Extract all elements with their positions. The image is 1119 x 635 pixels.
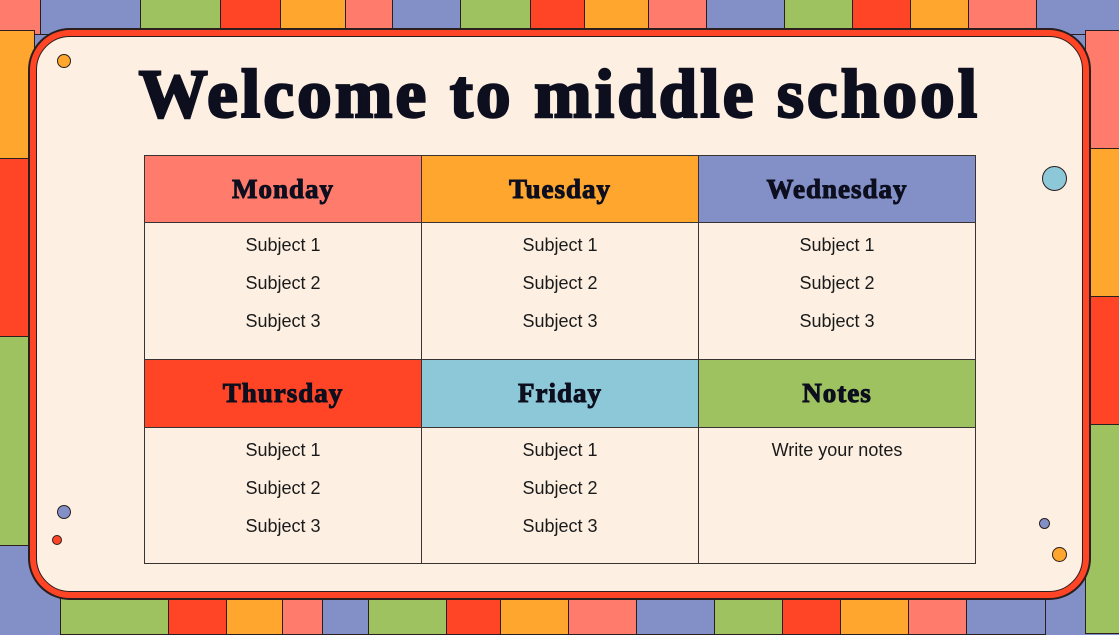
header: Monday	[144, 155, 422, 223]
header: Notes	[698, 359, 976, 428]
body: Tuesday subjects: Subject 2	[522, 273, 598, 293]
body: Friday subjects: Subject 1	[522, 440, 598, 460]
header: Wednesday	[698, 155, 976, 223]
header: Friday: Friday	[518, 378, 602, 408]
icon: teal dot	[1042, 166, 1067, 191]
body: Wednesday subjects: Subject 3	[799, 311, 875, 331]
body: Thursday subjects: Subject 1	[245, 440, 321, 460]
body: Monday subjects: Subject 2	[245, 273, 321, 293]
body: Wednesday subjects: Subject 1	[799, 235, 875, 255]
header: Notes: Notes	[802, 378, 872, 408]
body: Friday subjects	[421, 427, 699, 564]
body: Thursday subjects	[144, 427, 422, 564]
body: Friday subjects: Subject 3	[522, 516, 598, 536]
icon: orange dot	[57, 54, 71, 68]
body: Tuesday subjects	[421, 222, 699, 360]
body: Tuesday subjects: Subject 1	[522, 235, 598, 255]
icon: red dot	[52, 535, 62, 545]
body: Wednesday subjects: Subject 2	[799, 273, 875, 293]
body: Tuesday subjects: Subject 3	[522, 311, 598, 331]
header: Tuesday	[421, 155, 699, 223]
body: Thursday subjects: Subject 3	[245, 516, 321, 536]
header: Wednesday: Wednesday	[766, 174, 908, 204]
icon: blue dot	[57, 505, 71, 519]
header: Friday	[421, 359, 699, 428]
icon: orange dot right	[1052, 547, 1067, 562]
icon: small blue dot	[1039, 518, 1050, 529]
body: Thursday subjects: Subject 2	[245, 478, 321, 498]
header: Tuesday: Tuesday	[509, 174, 611, 204]
body: Notes: Write your notes	[772, 440, 902, 460]
body: Friday subjects: Subject 2	[522, 478, 598, 498]
body: Monday subjects	[144, 222, 422, 360]
title: Welcome to middle school	[139, 56, 980, 132]
body: Monday subjects: Subject 3	[245, 311, 321, 331]
body: Notes	[698, 427, 976, 564]
table: schedule	[144, 155, 976, 564]
header: Thursday	[144, 359, 422, 428]
body: Monday subjects: Subject 1	[245, 235, 321, 255]
header: Thursday: Thursday	[223, 378, 343, 408]
header: Monday: Monday	[232, 174, 334, 204]
body: Wednesday subjects	[698, 222, 976, 360]
